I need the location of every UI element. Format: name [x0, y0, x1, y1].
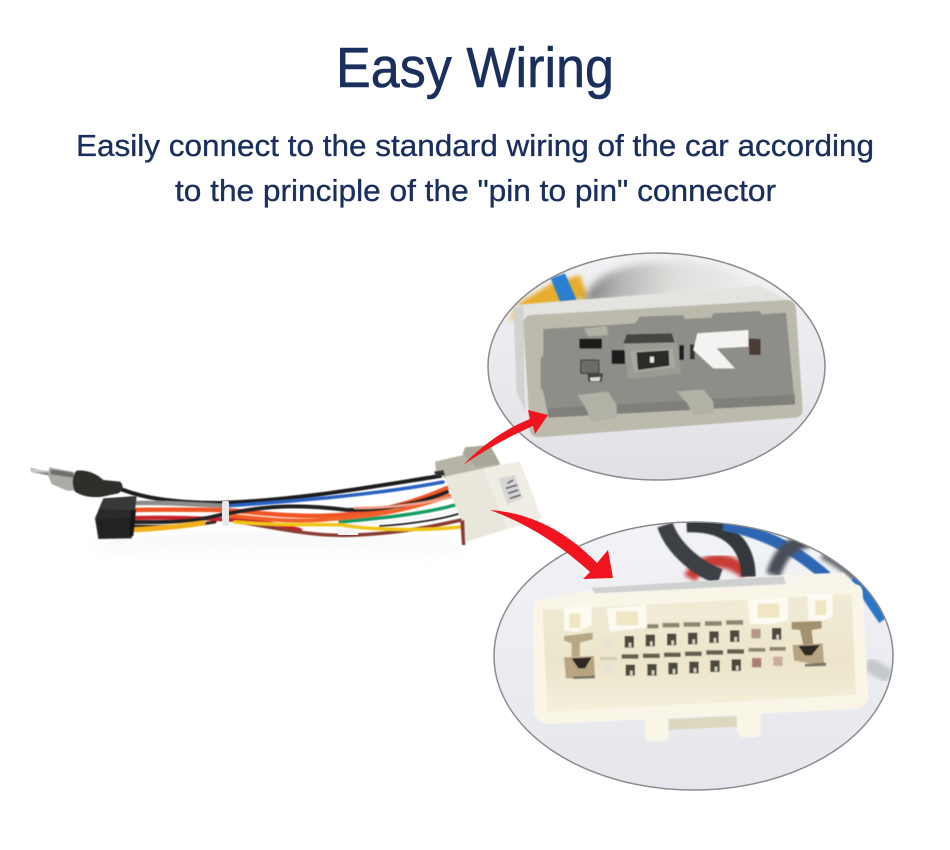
bundle of wires: [118, 476, 461, 535]
central terminal: [624, 338, 680, 378]
background cables: [665, 525, 890, 677]
terminal pins: [625, 628, 781, 676]
terminal slots: [579, 339, 602, 349]
small metal terminal: [581, 360, 599, 373]
connector feet: [668, 716, 737, 730]
title: Easy Wiring: [336, 36, 614, 100]
subtitle: [76, 128, 874, 208]
antenna plug: [31, 467, 123, 497]
subtitle: to the principle of the "pin to pin" connector: [175, 173, 776, 208]
connector photo: [533, 573, 868, 742]
background cables: [508, 262, 760, 323]
wire label tag: [338, 529, 358, 535]
terminal row top slots: [600, 620, 786, 660]
harness shadow: [100, 534, 460, 550]
connector clips: [584, 326, 608, 337]
arrow: to white connector: [490, 510, 613, 579]
wiring harness: [31, 445, 542, 550]
empty pin cavities: [751, 629, 761, 638]
cable tie: [222, 501, 229, 526]
left metal latch: [564, 633, 593, 657]
arrow: to grey connector: [463, 410, 548, 465]
white window opening: [693, 330, 748, 368]
right metal latch: [792, 621, 822, 645]
infographic canvas: [30, 46, 894, 791]
subtitle: Easily connect to the standard wiring of the car according: [76, 128, 874, 163]
connector photo: [513, 286, 803, 437]
black ISO connector: [95, 496, 137, 539]
grey connector: [434, 445, 501, 478]
white connector: [445, 462, 542, 545]
zoom circle: grey connector: [488, 253, 825, 480]
zoom circle: white connector: [494, 522, 893, 790]
locking tabs: [564, 606, 592, 632]
